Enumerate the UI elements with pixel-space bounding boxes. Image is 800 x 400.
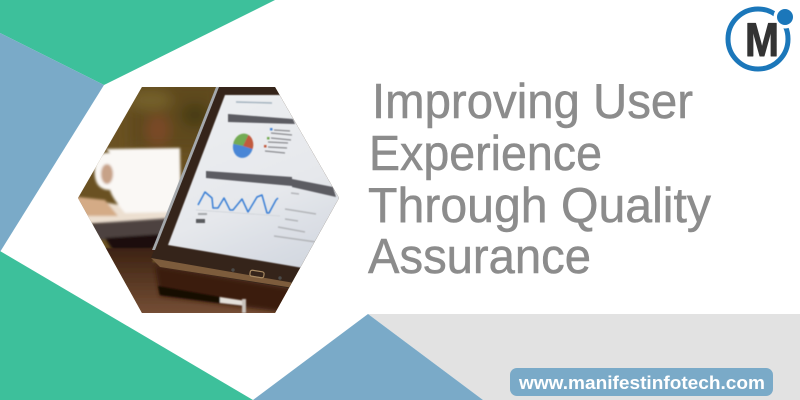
pie legend xyxy=(236,102,292,153)
bottom grey band xyxy=(368,314,800,400)
tablet screen xyxy=(168,95,345,275)
logo xyxy=(728,6,796,69)
dashboard side list xyxy=(274,193,316,242)
logo dot xyxy=(774,6,796,28)
tablet home button xyxy=(250,270,264,278)
bottom-left green shape xyxy=(0,251,253,400)
logo letter M: M xyxy=(745,13,779,66)
pie chart xyxy=(232,132,254,159)
title line 1: Improving User xyxy=(372,75,693,129)
dark desk xyxy=(92,216,165,249)
title line 4: Assurance xyxy=(368,230,591,284)
stylus pen xyxy=(158,286,246,313)
tablet body xyxy=(151,87,345,290)
tablet sensor dots xyxy=(231,268,282,280)
dashboard header bars xyxy=(206,114,336,197)
coffee cup and saucer xyxy=(70,148,185,226)
website pill xyxy=(510,368,773,396)
hexagon photo: tablet with analytics on a desk xyxy=(78,87,339,313)
top green shape xyxy=(0,0,275,85)
photo background xyxy=(78,87,339,313)
bottom blue triangle xyxy=(253,314,483,400)
title line 2: Experience xyxy=(369,127,602,181)
left blue shape xyxy=(0,33,104,252)
line chart xyxy=(196,192,280,223)
title xyxy=(368,75,711,284)
website url: www.manifestinfotech.com xyxy=(518,373,765,393)
tablet shadow on desk xyxy=(155,266,300,312)
logo ring xyxy=(728,9,788,69)
title line 3: Through Quality xyxy=(368,179,711,233)
